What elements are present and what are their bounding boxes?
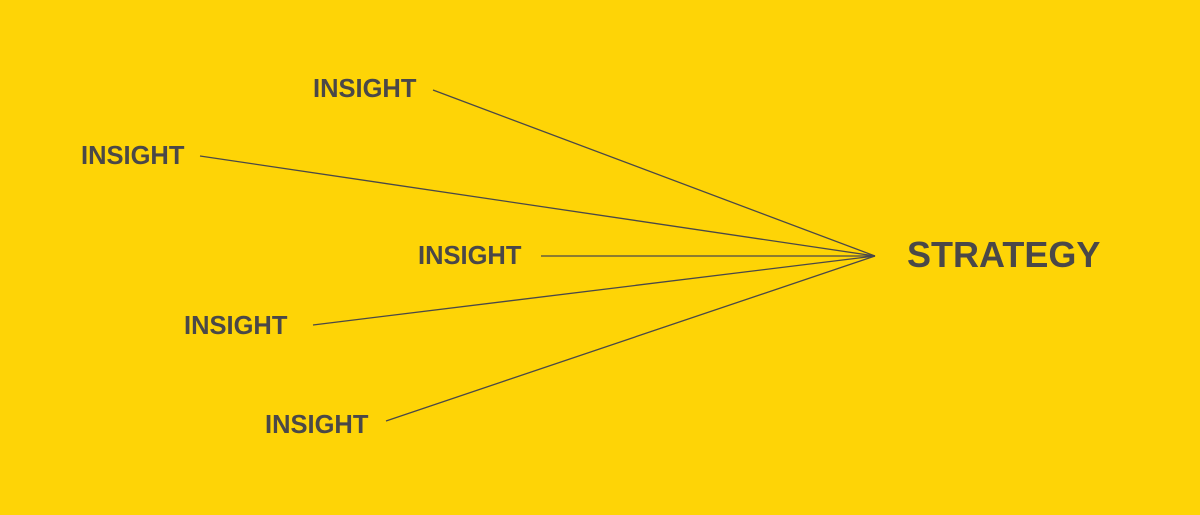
arrows: converging lines [200, 90, 875, 421]
label: insight 2: INSIGHT [81, 142, 185, 170]
label: insight 3: INSIGHT [418, 242, 522, 270]
label: insight 1: INSIGHT [313, 75, 417, 103]
label: insight 4: INSIGHT [184, 312, 288, 340]
label: insight 5: INSIGHT [265, 411, 369, 439]
label: strategy: STRATEGY [907, 234, 1100, 275]
